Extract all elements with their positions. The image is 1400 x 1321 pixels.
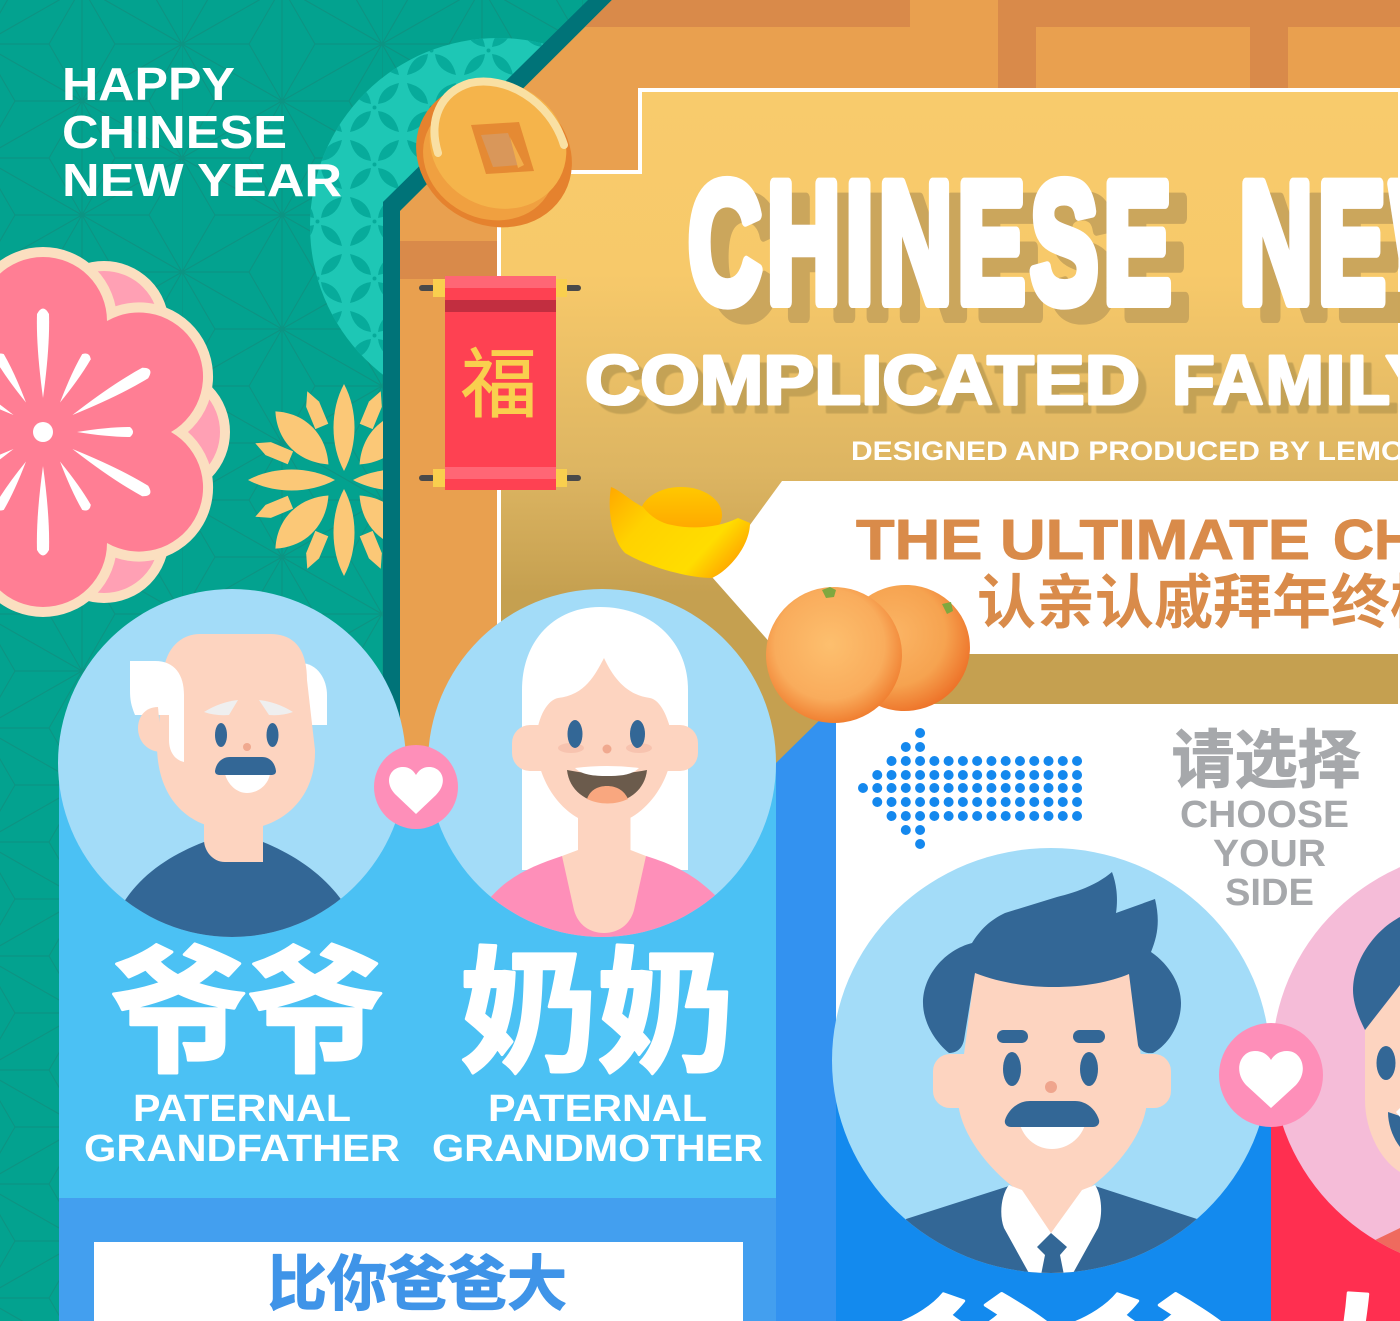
heading: happy chinese new year (62, 58, 342, 206)
grandfather english label (84, 1088, 400, 1170)
gold title panel (499, 90, 1400, 800)
grandfather english label: PATERNAL (133, 1088, 351, 1130)
father head (958, 970, 1147, 1234)
father ears (933, 1054, 1171, 1108)
grandmother english label (432, 1088, 763, 1170)
choose your side label: SIDE (1225, 872, 1314, 914)
grandfather hair right (300, 663, 327, 725)
grandfather neck (204, 800, 263, 862)
icon: gold ingot (610, 487, 750, 578)
grandmother hair (522, 607, 688, 870)
heading: happy chinese new year: NEW YEAR (62, 154, 342, 206)
grandfather hair left (130, 661, 184, 762)
grandfather shirt (125, 842, 341, 937)
heart badge: parents (1219, 1023, 1323, 1127)
gold star flower (248, 384, 383, 576)
portrait: mother (1276, 867, 1400, 1253)
blue side strip (776, 704, 836, 1321)
grandfather english label: GRANDFATHER (84, 1128, 400, 1170)
icon: gold coin (391, 56, 597, 254)
heart badge: grandparents (374, 745, 458, 829)
heading: happy chinese new year: HAPPY (62, 58, 235, 110)
white choose-your-side panel (836, 704, 1400, 1084)
grandmother chinese label: 奶奶 (460, 938, 734, 1091)
info box text: 比你爸爸大 (267, 1251, 567, 1318)
grandmother neck (562, 810, 646, 933)
father collar (1001, 1185, 1101, 1275)
grandmother mouth (567, 770, 647, 803)
grandmother ears (512, 725, 698, 771)
icon: mandarin oranges (757, 577, 978, 732)
dark teal frame edge (383, 0, 612, 780)
pink plum blossom (0, 257, 225, 607)
callout banner (712, 481, 1400, 654)
grandfather chinese label: 爷爷 (110, 938, 384, 1091)
white info box (94, 1242, 743, 1321)
portrait: grandmother (428, 589, 776, 945)
grandfather ear (138, 707, 162, 752)
subtitle: complicated family tree: COMPLICATED (585, 341, 1140, 419)
father hair (923, 872, 1181, 1053)
choose your side label: CHOOSE (1180, 794, 1349, 836)
heading: happy chinese new year: CHINESE (62, 106, 287, 158)
main title: chinese new year: CHINESE (688, 146, 1176, 338)
panel: mother (1271, 1126, 1400, 1321)
main title: chinese new year (688, 146, 1400, 338)
left panel: paternal grandparents (59, 763, 776, 1321)
decorative patterned teal disc (310, 38, 544, 374)
father suit (906, 1186, 1197, 1280)
grandmother blouse (491, 856, 715, 937)
grandfather head (157, 634, 315, 830)
choose your side label (1172, 726, 1360, 914)
dotted left arrow (863, 733, 1078, 844)
father tie (1037, 1233, 1067, 1275)
grandmother face (536, 658, 673, 825)
subtitle: complicated family tree (585, 341, 1400, 419)
icon: red fu scroll (419, 276, 581, 490)
choose your side label: YOUR (1213, 833, 1326, 875)
credit line: DESIGNED AND PRODUCED BY LEMON (851, 436, 1400, 466)
orange lattice frame (400, 0, 1400, 800)
portrait: father (832, 848, 1270, 1280)
callout english heading: THE ULTIMATE (856, 508, 1310, 572)
grandmother english label: GRANDMOTHER (432, 1128, 763, 1170)
fu character: 福 (461, 343, 537, 428)
grandmother english label: PATERNAL (488, 1088, 707, 1130)
choose your side label: 请选择 (1172, 726, 1360, 796)
panel: father (836, 1060, 1271, 1321)
portrait: grandfather (58, 589, 406, 945)
